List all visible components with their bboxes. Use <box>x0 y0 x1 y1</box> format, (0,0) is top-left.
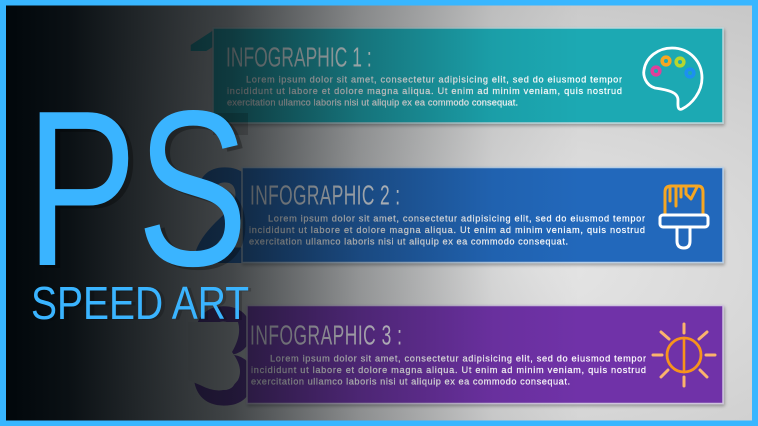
text block 3: Lorem ipsum dolor sit amet, consectetur adipisicing elit, sed do eiusmod tempor <box>270 354 646 364</box>
title: PS: PS <box>31 68 253 316</box>
text block 1 <box>227 74 622 108</box>
panel: infographic 2 <box>192 140 723 293</box>
panel: infographic 3 <box>188 277 723 426</box>
panel 3 background <box>247 306 723 404</box>
dark gradient overlay <box>0 0 580 426</box>
panel: infographic 1 <box>190 27 726 128</box>
text block 2: Lorem ipsum dolor sit amet, consectetur adipisicing elit, sed do eiusmod tempor <box>268 214 645 224</box>
number 2: 2 <box>192 140 258 293</box>
text block 1: Lorem ipsum dolor sit amet, consectetur adipisicing elit, sed do eiusmod tempor <box>246 74 622 84</box>
text block 3: exercitation ullamco laboris nisi ut aliquip ex ea commodo consequat. <box>251 376 570 386</box>
panel 1 background <box>213 28 723 123</box>
text block 2: exercitation ullamco laboris nisi ut aliquip ex ea commodo consequat. <box>249 236 568 246</box>
subtitle: speed art: SPEED ART <box>36 278 252 330</box>
text block 1: exercitation ullamco laboris nisi ut aliquip ex ea commodo consequat. <box>227 98 518 108</box>
heading 2: INFOGRAPHIC 2 : <box>250 179 400 211</box>
text block 1: incididunt ut labore et dolore magna aliqua. Ut enim ad minim veniam, quis nostrud <box>227 86 622 96</box>
text block 3: incididunt ut labore et dolore magna aliqua. Ut enim ad minim veniam, quis nostrud <box>251 365 646 375</box>
subtitle: speed art: SPEED ART <box>31 277 249 329</box>
text block 2 <box>249 214 645 246</box>
title: PS: PS <box>26 65 248 313</box>
heading 3: INFOGRAPHIC 3 : <box>250 319 402 351</box>
icon: sun <box>653 324 715 386</box>
panel 2 background <box>242 168 723 262</box>
text block 3 <box>251 354 646 386</box>
icon: palette <box>644 48 702 109</box>
text block 2: incididunt ut labore et dolore magna aliqua. Ut enim ad minim veniam, quis nostrud <box>249 225 645 235</box>
shadow block behind S <box>213 113 248 135</box>
heading 1: INFOGRAPHIC 1 : <box>226 41 372 73</box>
counter of number 3 <box>188 322 240 390</box>
icon: paint brush <box>660 186 708 248</box>
number 1: 1 <box>182 1 257 152</box>
